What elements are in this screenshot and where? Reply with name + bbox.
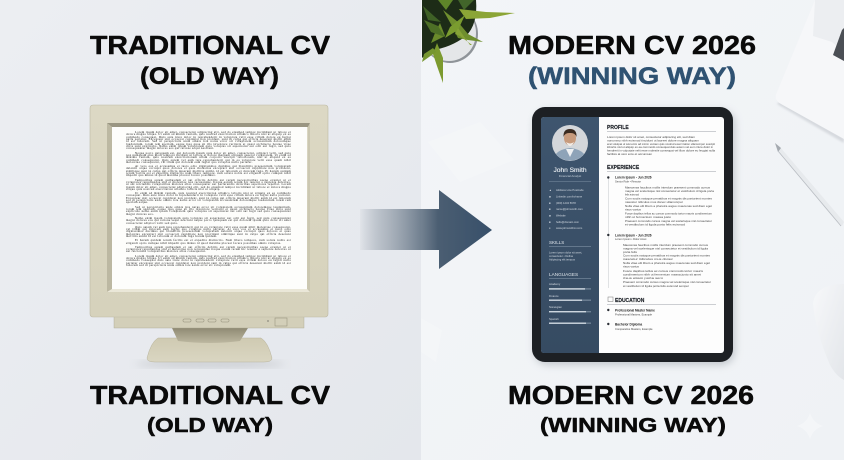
job title: Financial Analyst: [559, 174, 581, 178]
skills: Lorem ipsum dolor sit amet,: [549, 250, 582, 254]
experience section: Lorem Ipsum • Dolor Amet: [615, 237, 647, 241]
education section: Bachelor Diploma: [615, 322, 642, 326]
education section: Professional Masters, Example: [615, 312, 653, 316]
arrow: old to modern: [360, 190, 492, 269]
contact list: ◆: [549, 196, 552, 198]
languages: Spanish: [549, 317, 559, 321]
text: dense traditional CV document: At vero eos et accusamus et iusto odio dignissimos ducimus qui blanditiis praesentium voluptatum deleniti atque corrupti quos dolores et quas molestias excepturi sint occaecati cupiditate non provident, similique sunt in culpa qui officia deserunt mollitia animi, id est laborum et dolorum fuga. Et harum quidem rerum facilis est et expedita distinctio nam libero tempore, cum soluta nobis est eligendi optio cumque nihil impedit quo minus id quod maxime placeat facere possimus.: [126, 164, 291, 177]
name: John Smith: [554, 167, 587, 174]
title: traditional CV: TRADITIONAL CV: [90, 32, 330, 60]
contact list: ■: [549, 202, 551, 205]
text: dense traditional CV document: Sed ut perspiciatis unde omnis iste natus error sit voluptatem accusantium doloremque laudantium, totam rem aperiam, eaque ipsa quae ab illo inventore veritatis et quasi architecto beatae vitae dicta sunt explicabo nemo enim ipsam voluptatem quia voluptas sit aspernatur aut odit aut fugit sed quia consequuntur magni dolores eos.: [126, 205, 291, 216]
decoration: faint paper sheets on desk: [421, 122, 514, 362]
experience section: Fusce dapibus tellus ac cursus commodo tortor mauris: [623, 269, 704, 273]
skills: consectetur • Define: [549, 254, 574, 258]
experience section: risus varius: [623, 264, 640, 268]
experience section: Lorem Ipsum - Jun 2026: [615, 176, 652, 180]
education section: EDUCATION: [615, 298, 645, 304]
profile photo: [552, 125, 588, 161]
experience section: et vestibulum id ligula porta felis euismod semper: [623, 284, 689, 288]
experience section: magna vel scelerisque nisl consectetur et vestibulum id ligula: [623, 246, 709, 250]
monitor neck: [172, 328, 248, 343]
contact list: Website: [556, 214, 566, 218]
text: dense traditional CV document: Lorem ipsum dolor sit amet, consectetur adipiscing elit, sed do eiusmod tempor incididunt ut labore et dolore magna aliqua. Ut enim ad minim veniam, quis nostrud exercitation ullamco laboris nisi ut aliquip ex ea commodo consequat duis aute irure dolor in reprehenderit voluptate velit esse cillum dolore eu fugiat nulla pariatur excepteur sint occaecat cupidatat non proident sunt in culpa qui officia deserunt mollit anim id est laborum sed ut perspiciatis unde omnis iste natus error sit voluptatem.: [126, 254, 291, 267]
monitor bezel: [107, 123, 310, 127]
contact list: ◆: [549, 214, 552, 218]
experience section: EXPERIENCE: [607, 165, 640, 171]
text: dense traditional CV document: Nemo enim ipsam voluptatem quia voluptas sit aspernatur aut odit aut fugit, sed quia consequuntur magni dolores eos qui ratione sequi nesciunt neque porro quisquam est qui dolorem ipsum quia dolor sit amet consectetur adipisci velit sed quia.: [126, 216, 291, 224]
text: dense traditional CV document: Temporibus autem quibusdam et aut officiis debitis aut rerum necessitatibus saepe eveniet ut et voluptates repudiandae sint et molestiae non recusandae itaque earum rerum hic tenetur a sapiente delectus ut aut reiciendis voluptatibus maiores alias consequatur.: [126, 245, 291, 253]
profile section: facilisis at vero eros et accumsan: [607, 152, 653, 156]
contact list: name@johnsmith.com: [556, 207, 584, 211]
tablet body: [532, 107, 733, 362]
text: dense traditional CV document: Temporibus autem quibusdam et aut officiis debitis aut rerum necessitatibus saepe eveniet ut et voluptates repudiandae sint et molestiae non recusandae. Itaque earum rerum hic tenetur a sapiente delectus, ut aut reiciendis voluptatibus maiores alias consequatur aut perferendis doloribus asperiores repellat. Lorem ipsum dolor sit amet, consectetur adipiscing elit, sed do eiusmod tempor incididunt ut labore et dolore magna aliqua quis nostrud exercitation ullamco laboris nisi ut aliquip.: [126, 178, 291, 191]
caption: modern CV 2026: (WINNING WAY): [540, 415, 726, 437]
text: dense traditional CV document: [126, 131, 291, 285]
experience section: condimentum nibh ut fermentum massa justo sit amet: [623, 272, 701, 276]
icon: laptop corner: [776, 0, 844, 143]
experience section: et vestibulum id ligula porta felis euismod: [625, 222, 686, 226]
experience section: risus varius: [625, 208, 642, 212]
experience section: porta felis: [623, 250, 638, 254]
contact list: hello@domain.com: [556, 220, 580, 224]
education section: Comparative Masters, Example: [615, 327, 653, 331]
panel: traditional CV background: [0, 0, 421, 460]
skills: [549, 240, 591, 262]
icon: sparkle watermark: [797, 413, 823, 439]
experience section: nascetur ridiculus mus donec: [623, 257, 674, 261]
profile section: hendrerit in vulputate velit esse molestie consequat vel illum dolore eu feugiat nulla: [607, 149, 716, 153]
contact list: ▲: [549, 189, 552, 192]
languages: Norwegian: [549, 305, 562, 309]
profile section: [607, 125, 716, 156]
profile section: lobortis nisl ut aliquip ex ea commodo consequat duis autem vel eum iriure dolor in: [607, 145, 714, 149]
experience section: magna vel scelerisque nisl consectetur et vestibulum id ligula porta: [625, 189, 715, 193]
contact list: ■: [549, 208, 551, 211]
languages: [549, 272, 591, 324]
languages: LANGUAGES: [549, 272, 578, 277]
text: dense traditional CV document: Ut enim ad minim veniam, quis nostrud exercitation ullamco laboris nisi ut aliquip ex ea commodo consequat. Duis aute irure dolor in reprehenderit in voluptate velit esse cillum dolore eu fugiat nulla pariatur. Excepteur sint occaecat cupidatat non proident, sunt in culpa qui officia deserunt mollit anim id est laborum sed ut perspiciatis unde omnis iste natus error sit voluptatem accusantium doloremque laudantium totam rem aperiam eaque.: [126, 191, 291, 204]
contact list: [549, 188, 584, 230]
experience section: Nulla vitae elit libero a pharetra augue maecenas sed diam eget: [623, 261, 710, 265]
caption: traditional CV: (OLD WAY): [147, 415, 273, 437]
CV page: [541, 117, 724, 353]
contact list: ■: [549, 221, 551, 224]
profile section: Lorem ipsum dolor sit amet, consectetur adipiscing elit, sed diam: [607, 135, 696, 139]
experience section: Maecenas faucibus mollis interdum praesent commodo cursus: [625, 186, 711, 190]
experience section: nascetur ridiculus mus donec ullamcorper: [625, 200, 683, 204]
contact list: Linkedin.com/in/name: [556, 194, 583, 198]
text: dense traditional CV document: Et harum quidem rerum facilis est et expedita distinctio. Nam libero tempore, cum soluta nobis est eligendi optio cumque nihil impedit quo minus id quod maxime placeat facere possimus omnis voluptas.: [126, 238, 291, 245]
profile section: PROFILE: [607, 125, 629, 131]
experience section: Maecenas faucibus mollis interdum praesent commodo cursus: [623, 243, 709, 247]
caption: modern CV 2026: [508, 382, 754, 437]
education section: [607, 297, 716, 331]
caption: traditional CV: TRADITIONAL CV: [90, 382, 330, 410]
experience section: Praesent commodo cursus magna vel scelerisque nisl consectetur: [623, 280, 711, 284]
experience section: [607, 165, 716, 288]
monitor screen: [112, 127, 307, 289]
experience section: Senior Role • Remote: [615, 180, 641, 184]
title: modern CV 2026: MODERN CV 2026: [508, 32, 756, 60]
icon: mouse: [813, 284, 844, 380]
profile section: nonummy nibh euismod tincidunt ut laoreet dolore magna aliquam: [607, 138, 700, 142]
title: traditional CV: [90, 32, 330, 90]
monitor control strip: [114, 316, 304, 328]
skills: Adipiscing elit tempus: [549, 258, 576, 262]
experience section: Fusce dapibus tellus ac cursus commodo tortor mauris condimentum: [625, 212, 713, 216]
experience section: risus etiam porta sem: [623, 276, 664, 280]
experience section: Cum sociis natoque penatibus et magnis dis parturient montes: [625, 196, 713, 200]
experience section: Cum sociis natoque penatibus et magnis dis parturient montes: [623, 254, 711, 258]
experience section: Nulla vitae elit libero a pharetra augue maecenas sed diam eget: [625, 204, 712, 208]
caption: traditional CV: [90, 382, 330, 437]
caption: modern CV 2026: MODERN CV 2026: [508, 382, 754, 410]
title: modern CV 2026: (WINNING WAY): [528, 63, 736, 90]
CV sidebar: [541, 117, 599, 353]
experience section: Praesent commodo cursus magna vel scelerisque nisl consectetur: [625, 219, 712, 223]
education section: Professional Master Name: [615, 308, 655, 312]
title: traditional CV: (OLD WAY): [140, 63, 279, 90]
panel: modern CV background: [421, 0, 844, 460]
illustration: tablet showing modern CV: [532, 107, 735, 365]
contact list: www.johnsmithcv.com: [556, 226, 583, 230]
icon: potted plant: [422, 0, 515, 83]
text: dense traditional CV document: Neque porro quisquam est, qui dolorem ipsum quia dolor sit amet, consectetur, adipisci velit, sed quia non numquam eius modi tempora incidunt ut labore et dolore magnam aliquam quaerat voluptatem. Ut enim ad minima veniam, quis nostrum exercitationem ullam corporis suscipit laboriosam, nisi ut aliquid ex ea commodi consequatur. Quis autem vel eum iure reprehenderit qui in ea voluptate velit esse quam nihil molestiae consequatur, vel illum qui dolorem eum fugiat quo voluptas nulla pariatur.: [126, 151, 291, 164]
contact list: ●: [549, 227, 551, 230]
monitor foot: [147, 338, 272, 362]
languages: Academy: [549, 282, 561, 286]
icon: pen: [775, 143, 844, 226]
contact list: Address Line Postcode: [556, 188, 584, 192]
experience section: Lorem Ipsum - Jun 2026: [615, 234, 652, 238]
illustration: CRT monitor: [90, 105, 328, 368]
experience section: nibh ut fermentum massa justo: [625, 215, 672, 219]
experience section: felis euismod: [625, 192, 639, 196]
contact list: (000) 1234 5678: [556, 201, 576, 205]
monitor casing: [90, 105, 328, 317]
profile section: erat volutpat ut wisi enim ad minim veniam quis nostrud exerci tation ullamcorper suscipit: [607, 142, 715, 146]
title: modern CV 2026: [508, 32, 756, 90]
skills: SKILLS: [549, 240, 564, 245]
text: dense traditional CV document: Quis autem vel eum iure reprehenderit qui in ea voluptate velit esse quam nihil molestiae consequatur, vel illum qui dolorem eum fugiat quo voluptas nulla pariatur. At vero eos et accusamus et iusto odio dignissimos ducimus qui blanditiis praesentium voluptatum deleniti atque corrupti quos dolores et quas molestias excepturi sint occaecati cupiditate non provident similique sunt in culpa qui officia deserunt mollitia animi id est laborum et dolorum fuga harum quidem.: [126, 225, 291, 238]
languages: Finance: [549, 294, 559, 298]
